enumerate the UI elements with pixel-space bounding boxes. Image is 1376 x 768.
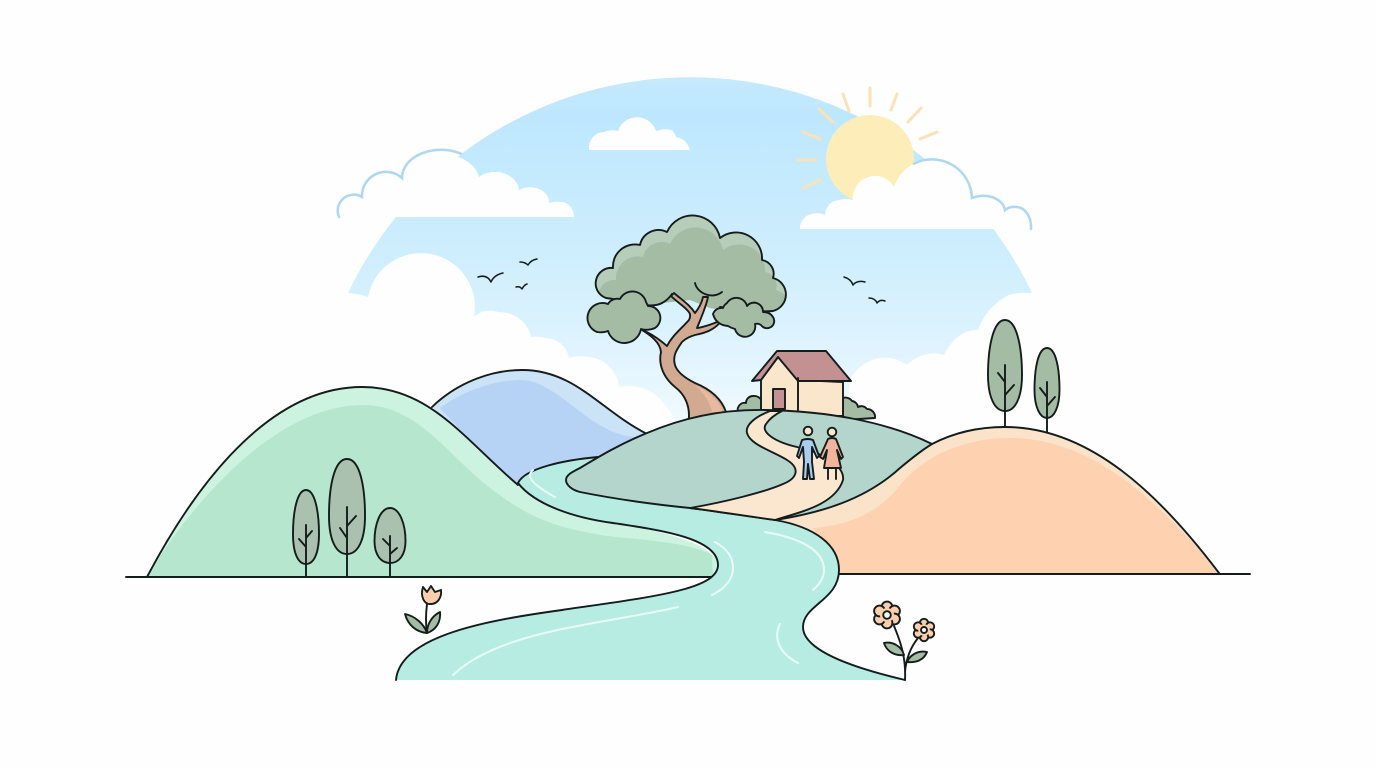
bushes beside house — [738, 396, 875, 420]
flowers: daisy pair — [874, 602, 934, 680]
tree: tall middle — [329, 459, 365, 577]
daisy: large — [874, 602, 900, 628]
landscape illustration — [125, 77, 1251, 681]
river banks — [518, 457, 598, 483]
cloud: upper left with blue outline — [338, 150, 574, 217]
house walls — [761, 357, 843, 416]
bush: left — [738, 396, 762, 414]
cloud: lower right — [840, 293, 1040, 440]
tree canopy: left cluster — [587, 291, 660, 343]
trunk highlight — [695, 385, 723, 412]
sky dome — [347, 77, 1033, 440]
flower: tulip — [405, 586, 441, 633]
birds: left flock — [478, 259, 537, 289]
sun rays — [798, 88, 937, 188]
sun — [798, 88, 937, 203]
daisy stems — [894, 626, 918, 680]
daisy leaves — [884, 643, 904, 655]
house corner — [797, 378, 799, 412]
couple walking — [797, 427, 843, 479]
bush: right — [843, 398, 875, 420]
tree canopy: right cluster — [713, 298, 774, 337]
tree trunk — [642, 293, 726, 425]
tree canopy: main — [594, 214, 787, 312]
daisy: small — [914, 619, 934, 641]
person: man — [797, 427, 819, 479]
tulip leaves — [405, 614, 427, 633]
tree canopy: inner arc — [695, 283, 722, 295]
winding footpath — [690, 411, 843, 520]
house roof — [752, 351, 851, 381]
river — [396, 457, 905, 680]
sun disc — [826, 115, 914, 203]
house door — [773, 389, 785, 409]
large tree — [587, 215, 789, 425]
tree: small left — [293, 490, 319, 577]
hill: blue — [432, 370, 647, 490]
tree: narrow right — [1034, 348, 1060, 432]
large lower clouds — [330, 253, 1040, 440]
cloud: small top — [589, 117, 690, 150]
tree: tall right — [988, 320, 1022, 428]
tulip stem — [426, 604, 427, 633]
cloud: lower left — [330, 253, 682, 440]
tulip head — [422, 586, 441, 604]
tree: short right — [374, 508, 406, 577]
trees: green hill grove — [293, 459, 406, 577]
cloud: upper right with blue outline — [800, 159, 1031, 229]
hill: green — [147, 387, 718, 577]
hill: orange — [775, 427, 1219, 573]
ground lines — [126, 574, 1250, 577]
birds: right flock — [844, 277, 885, 303]
river highlights — [453, 470, 824, 675]
person: woman — [820, 428, 843, 479]
house — [752, 351, 851, 416]
hill: central teal — [566, 410, 932, 520]
